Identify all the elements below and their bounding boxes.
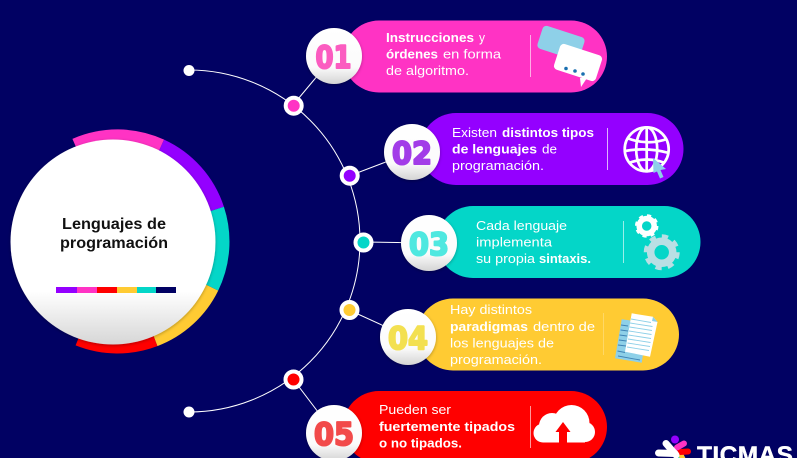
icon: gears <box>636 216 678 268</box>
text 04 <box>450 302 595 367</box>
panel: 02 <box>384 113 684 185</box>
icon: documents <box>615 313 658 363</box>
central title <box>60 216 168 252</box>
text 02: programación. <box>452 158 544 173</box>
icon: chat bubbles <box>536 25 603 87</box>
panel: 03 <box>401 206 700 278</box>
text 04: los lenguajes de <box>450 336 554 350</box>
panel: 05 <box>306 391 607 458</box>
central title: Lenguajes de <box>62 216 166 233</box>
badge 05: 05 <box>314 417 354 453</box>
pill 04 <box>417 298 679 370</box>
pill 05 <box>343 391 607 458</box>
pill 02 <box>420 113 684 185</box>
badge 02: 02 <box>392 136 432 172</box>
text 01: y <box>479 30 485 45</box>
badge 03: 03 <box>409 227 449 263</box>
text 01 <box>386 30 502 78</box>
text 01: de algoritmo. <box>386 63 469 78</box>
panel: 01 <box>306 20 607 92</box>
white disc <box>10 140 216 344</box>
logo: TICMAS <box>658 436 793 458</box>
pill 03 <box>437 206 700 278</box>
text 01: Instrucciones <box>386 30 474 45</box>
text 02: de <box>542 142 557 156</box>
logo flower <box>658 436 688 458</box>
text 05: fuertemente tipados <box>379 419 515 434</box>
badge 04: 04 <box>388 321 428 357</box>
icon: cloud upload <box>534 405 595 442</box>
text 04: Hay distintos <box>450 302 533 317</box>
text 02: Existen <box>452 125 497 140</box>
badge 01 <box>306 28 362 84</box>
timeline arc <box>184 56 429 433</box>
text 03: su propia <box>476 251 536 266</box>
panel: 04 <box>380 298 679 370</box>
text 01: órdenes <box>386 46 438 62</box>
text 04: dentro de <box>533 319 595 334</box>
text 02 <box>452 125 594 173</box>
text 01: en forma <box>443 46 502 62</box>
text 03: Cada lenguaje <box>476 218 567 233</box>
badge 05 <box>306 405 362 458</box>
text 02: distintos tipos <box>502 125 594 140</box>
coloured ring <box>72 129 229 353</box>
text 02: de lenguajes <box>452 142 537 156</box>
text 03: sintaxis. <box>539 251 591 266</box>
text 05: o no tipados. <box>379 436 462 450</box>
badge 01: 01 <box>316 40 352 76</box>
text 05 <box>379 402 515 450</box>
colour stripe <box>56 287 176 293</box>
text 03: implementa <box>476 234 553 250</box>
central title: programación <box>60 235 168 252</box>
pill 01 <box>343 20 607 92</box>
icon: globe with cursor <box>625 127 669 178</box>
timeline nodes <box>286 98 372 387</box>
text 04: programación. <box>450 352 542 367</box>
badge 03 <box>401 215 457 271</box>
text 03 <box>476 218 591 266</box>
text 04: paradigmas <box>450 319 528 334</box>
text 05: Pueden ser <box>379 402 452 417</box>
central circle: Lenguajes de programación <box>10 129 229 353</box>
badge 02 <box>384 124 440 180</box>
badge 04 <box>380 309 436 365</box>
